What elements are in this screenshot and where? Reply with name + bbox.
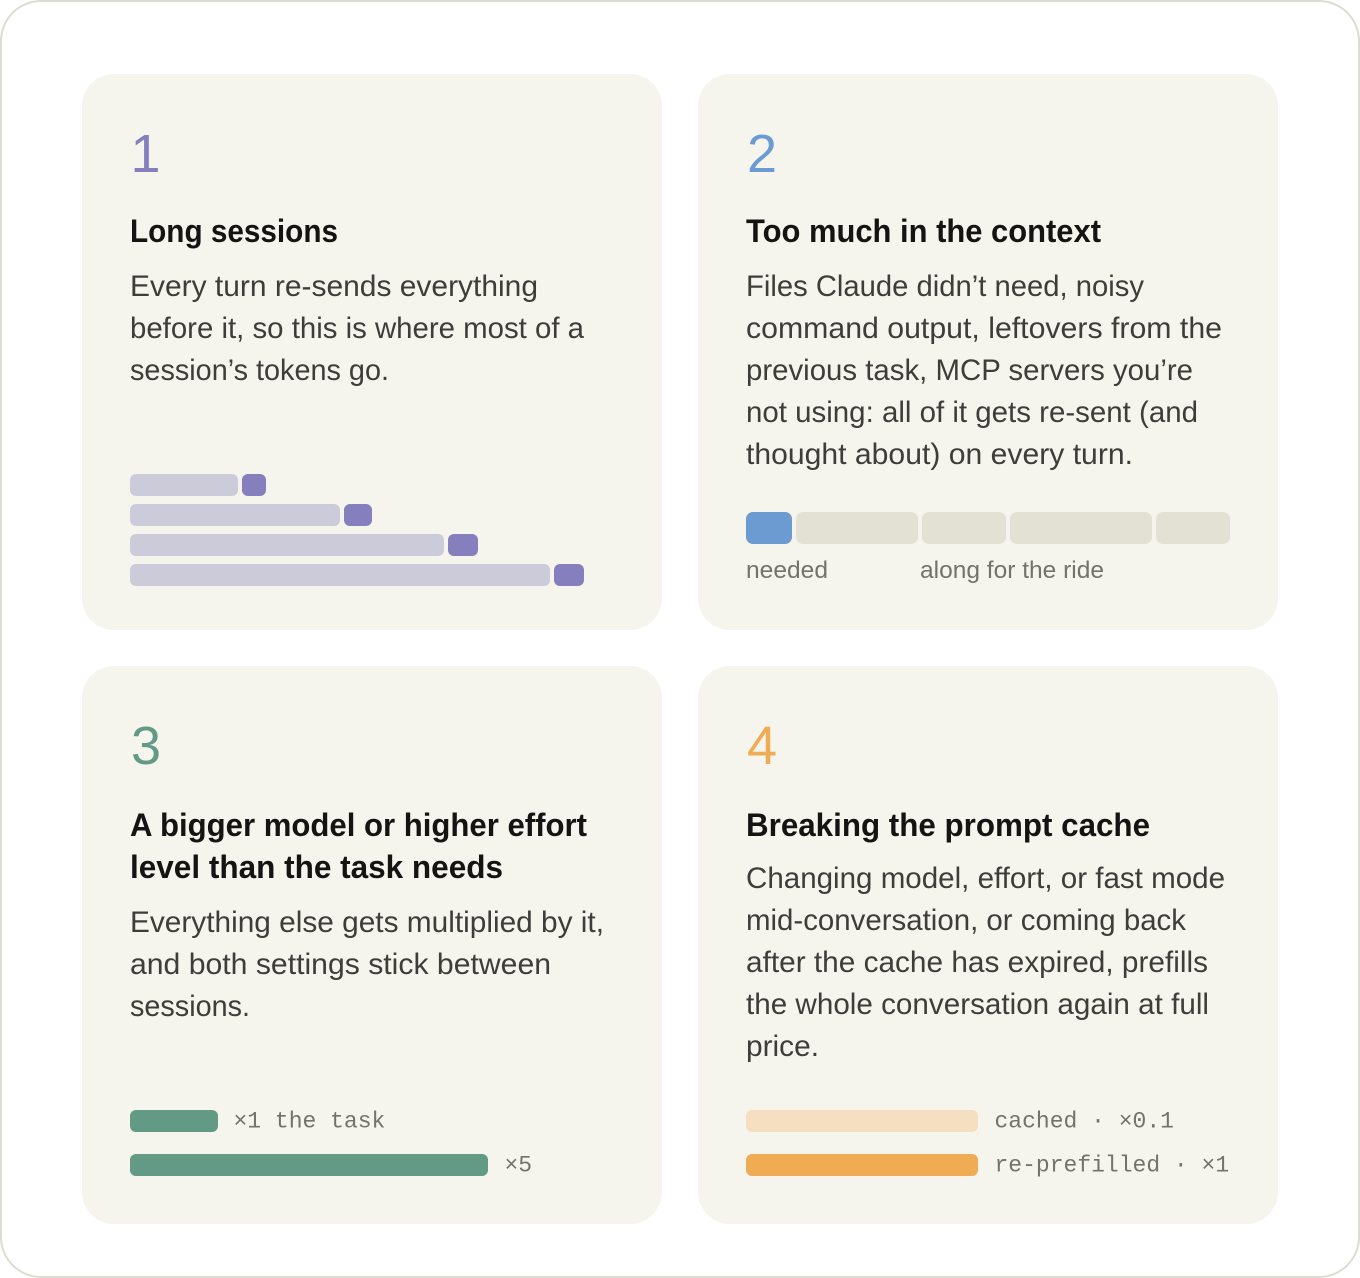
body text: breaking the prompt cache: price.	[746, 1030, 819, 1063]
body text: long sessions: Every turn re-sends everything	[130, 270, 538, 303]
heading: bigger model or higher effort: A bigger model or higher effort	[130, 807, 587, 843]
body text: long sessions: session’s tokens go.	[130, 354, 389, 387]
bar: re-prefilled x1	[746, 1152, 1229, 1178]
body text: too much in the context: not using: all of it gets re-sent (and	[746, 396, 1198, 429]
panel: bigger model or higher effort	[82, 666, 662, 1224]
body text: too much in the context: command output, leftovers from the	[746, 312, 1222, 345]
body text: bigger model or higher effort: sessions.	[130, 990, 250, 1023]
body text: long sessions: before it, so this is where most of a	[130, 312, 584, 345]
body text: breaking the prompt cache: Changing model, effort, or fast mode	[746, 862, 1225, 895]
body text: bigger model or higher effort: Everything else gets multiplied by it,	[130, 906, 604, 939]
body text: breaking the prompt cache	[746, 862, 1225, 1063]
heading: bigger model or higher effort: level than the task needs	[130, 849, 503, 885]
chart: growing session bars	[130, 474, 584, 586]
body text: bigger model or higher effort: and both settings stick between	[130, 948, 551, 981]
bar: x1 the task	[130, 1108, 385, 1134]
body text: too much in the context	[746, 270, 1222, 471]
label: along for the ride: along for the ride	[920, 557, 1104, 584]
heading: long sessions: Long sessions	[130, 213, 338, 249]
bar: cached x0.1	[746, 1108, 1174, 1134]
bar: x5: ×5	[504, 1152, 532, 1178]
bar: x1 the task: ×1 the task	[234, 1108, 385, 1134]
body text: too much in the context: previous task, MCP servers you’re	[746, 354, 1193, 387]
bar: re-prefilled x1: re-prefilled · ×1	[994, 1152, 1229, 1178]
bar: cached x0.1: cached · ×0.1	[994, 1108, 1174, 1134]
panel: long sessions	[82, 74, 662, 630]
body text: bigger model or higher effort	[130, 906, 604, 1023]
bar: x5	[130, 1152, 532, 1178]
number 3: 3	[131, 716, 161, 776]
body text: too much in the context: Files Claude didn’t need, noisy	[746, 270, 1144, 303]
number 1: 1	[130, 124, 161, 184]
heading: breaking the prompt cache: Breaking the prompt cache	[746, 807, 1150, 843]
heading: bigger model or higher effort	[130, 807, 587, 885]
body text: breaking the prompt cache: after the cache has expired, prefills	[746, 946, 1208, 979]
body text: too much in the context: thought about) on every turn.	[746, 438, 1133, 471]
chart: context segments	[746, 512, 1230, 544]
label: needed: needed	[746, 557, 828, 584]
heading: too much in the context: Too much in the context	[746, 213, 1101, 249]
panel: breaking the prompt cache	[698, 666, 1278, 1224]
body text: breaking the prompt cache: the whole conversation again at full	[746, 988, 1209, 1021]
number 2: 2	[747, 124, 777, 184]
body text: long sessions	[130, 270, 584, 387]
number 4: 4	[747, 716, 777, 776]
body text: breaking the prompt cache: mid-conversation, or coming back	[746, 904, 1187, 937]
panel: too much in the context	[698, 74, 1278, 630]
